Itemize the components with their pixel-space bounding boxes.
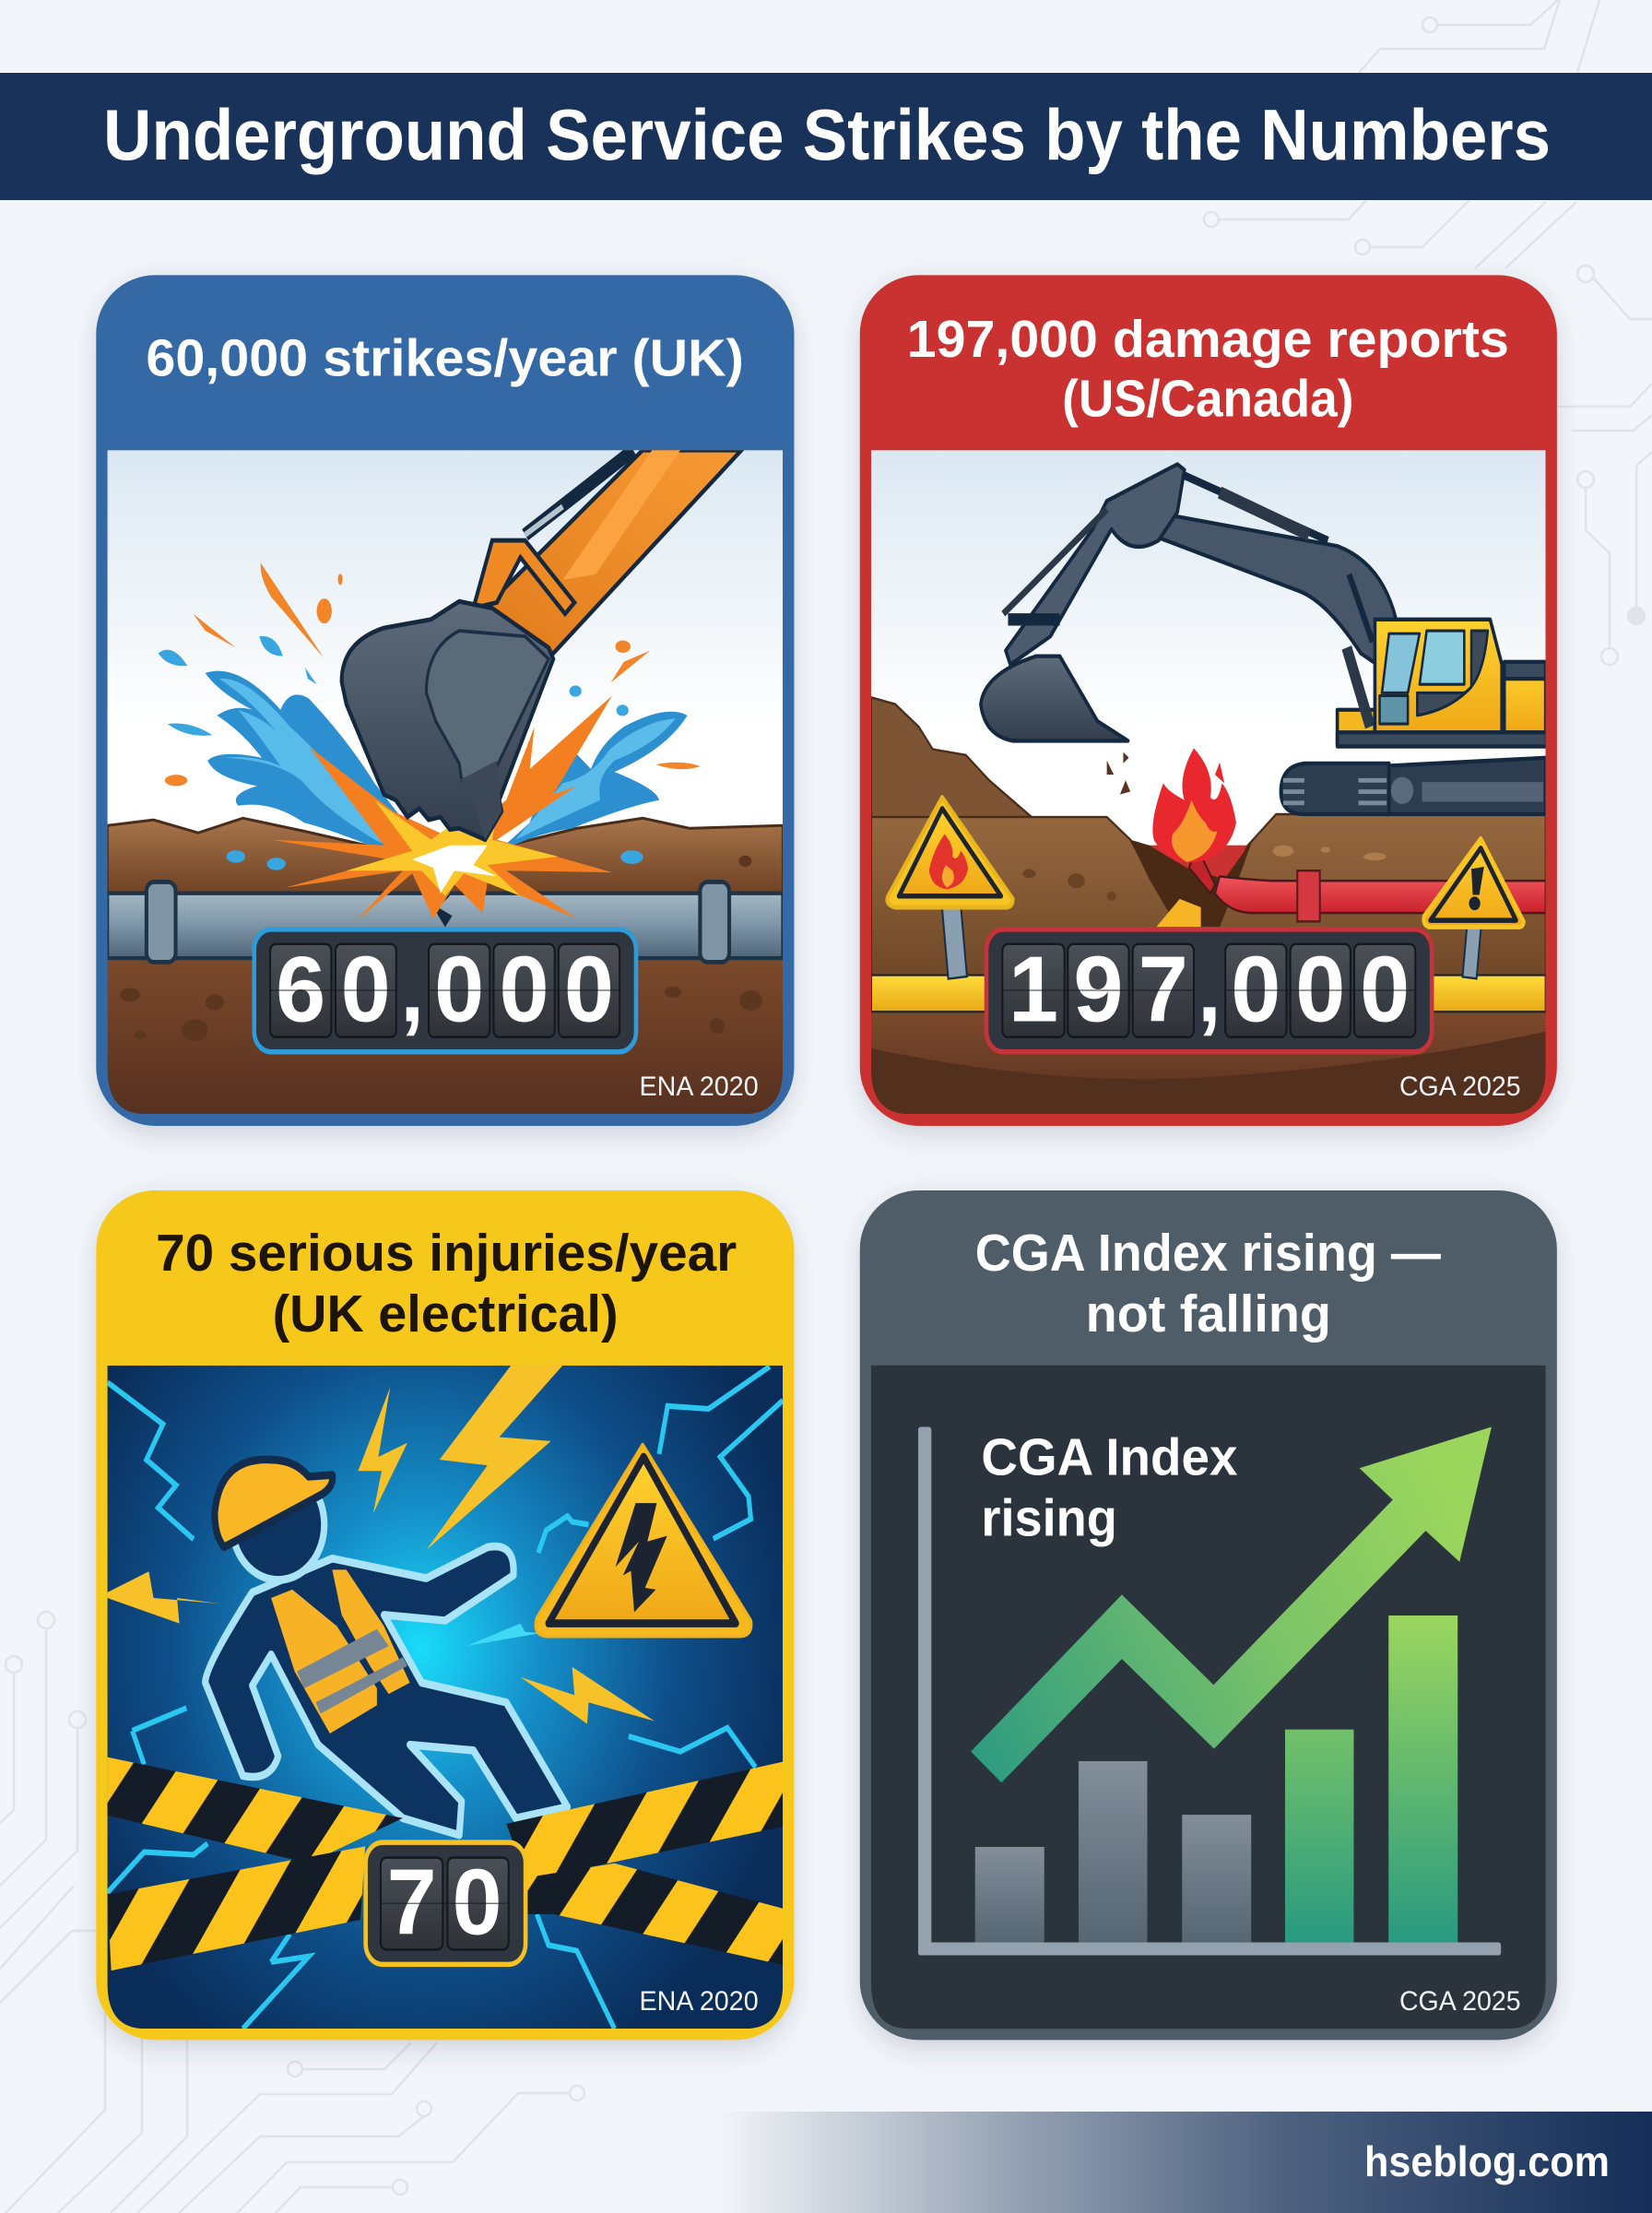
flip counter 197,000: 0 (1360, 937, 1410, 1041)
heading (975, 1224, 1441, 1343)
warning sign: electrical hazard (536, 1445, 751, 1637)
source: CGA 2025 (1399, 1986, 1521, 2016)
illustration: excavator bucket striking pipe (108, 450, 783, 1114)
flip counter 60,000: 0 (564, 937, 614, 1041)
source: CGA 2025 (1399, 1071, 1521, 1101)
flip counter 60,000: 6 (276, 937, 325, 1041)
flip counter 197,000: 1 (1009, 937, 1058, 1041)
flip counter 197,000: 7 (1139, 937, 1188, 1041)
title banner (0, 73, 1652, 200)
warning sign: flame (888, 798, 1013, 979)
chart area (871, 1366, 1546, 2029)
flip counter 60,000 (254, 929, 636, 1052)
chart label (981, 1428, 1238, 1547)
heading: 70 serious injuries/year (156, 1224, 737, 1282)
flip counter 197,000 (986, 929, 1432, 1052)
heading: (US/Canada) (1062, 369, 1353, 427)
panel: 197,000 damage reports US/Canada (860, 275, 1557, 1126)
flip counter 197,000: , (1198, 937, 1221, 1041)
heading: (UK electrical) (273, 1284, 619, 1343)
heading (907, 310, 1509, 427)
heading: 60,000 strikes/year (UK) (146, 328, 744, 386)
panel: 70 serious injuries per year (96, 1190, 794, 2040)
warning sign: exclamation (1423, 838, 1524, 978)
flip counter 70 (366, 1842, 525, 1964)
caution tape (108, 1757, 783, 1970)
flip counter 70: 7 (387, 1850, 437, 1954)
heading: not falling (1086, 1284, 1331, 1343)
flip counter 60,000: , (400, 937, 424, 1041)
flip counter 197,000: 9 (1073, 937, 1123, 1041)
flip counter 60,000: 0 (341, 937, 391, 1041)
title: Underground Service Strikes by the Numbers (103, 94, 1551, 175)
chart label: rising (981, 1489, 1117, 1547)
footer band (719, 2112, 1652, 2213)
worker figure (206, 1460, 568, 1835)
source: ENA 2020 (640, 1986, 759, 2016)
illustration: excavator over ruptured gas pipe (871, 450, 1547, 1114)
chart label: CGA Index (981, 1428, 1238, 1486)
heading: CGA Index rising — (975, 1224, 1441, 1282)
arrow: upward trend (971, 1427, 1492, 1782)
panel: CGA index rising (860, 1190, 1557, 2040)
illustration: electrocuted worker (108, 1366, 783, 2029)
flip counter 60,000: 0 (500, 937, 549, 1041)
heading: 197,000 damage reports (907, 310, 1509, 368)
flip counter 60,000: 0 (434, 937, 484, 1041)
bar chart: rising index (918, 1427, 1501, 1956)
source: ENA 2020 (640, 1071, 759, 1101)
panel: 60,000 strikes per year UK (96, 275, 794, 1126)
footer website: hseblog.com (1364, 2137, 1610, 2185)
flip counter 197,000: 0 (1295, 937, 1345, 1041)
heading (156, 1224, 737, 1343)
flip counter 197,000: 0 (1231, 937, 1280, 1041)
excavator (981, 464, 1547, 814)
flip counter 70: 0 (453, 1850, 502, 1954)
